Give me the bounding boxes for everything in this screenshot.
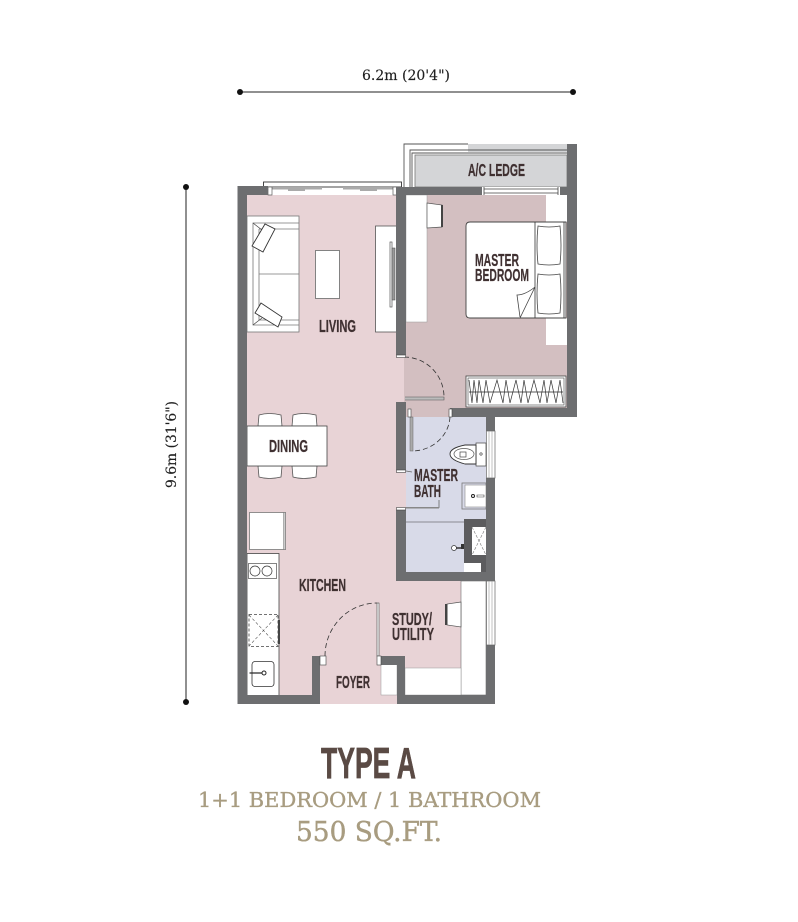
dining table and chairs <box>247 414 327 478</box>
subtitle: area: 550 SQ.FT. <box>296 817 442 848</box>
label: foyer: FOYER <box>336 672 370 692</box>
label: master bedroom <box>475 250 529 285</box>
dimension: width: 6.2m (20'4") <box>362 68 450 84</box>
label: dining: DINING <box>269 436 308 456</box>
label: master bath: MASTER <box>414 465 458 485</box>
title: TYPE A <box>321 739 416 788</box>
label: study/utility <box>392 609 434 644</box>
study window <box>486 581 495 645</box>
bathroom sink <box>462 483 486 509</box>
sofa <box>247 216 299 332</box>
toilet <box>450 443 486 466</box>
bathroom partitions <box>406 471 464 522</box>
A/C ledge <box>404 144 567 187</box>
bedroom desk <box>406 195 443 322</box>
floor: master bedroom <box>404 195 567 417</box>
subtitle: bedrooms: 1+1 BEDROOM / 1 BATHROOM <box>198 788 541 812</box>
bedroom door <box>404 357 444 400</box>
wardrobe <box>466 376 566 407</box>
fridge <box>250 512 286 550</box>
label: kitchen: KITCHEN <box>299 575 346 595</box>
living window <box>264 182 402 195</box>
floor: master bath <box>406 417 486 572</box>
dimension: width <box>237 68 576 95</box>
label: master bath: BATH <box>414 481 441 501</box>
label: study/utility: STUDY/ <box>392 609 432 629</box>
nightstands <box>546 195 567 345</box>
floor: living, dining, kitchen <box>247 195 461 704</box>
bathroom door <box>410 417 450 451</box>
shower <box>452 519 486 572</box>
label: master bath <box>414 465 458 501</box>
TV console <box>376 226 396 332</box>
dimension: height <box>164 184 189 705</box>
bathroom window <box>486 431 495 478</box>
walls <box>238 144 577 704</box>
label: master bedroom: BEDROOM <box>475 265 529 285</box>
dimension: height: 9.6m (31'6") <box>164 401 180 488</box>
entrance door <box>325 603 379 656</box>
kitchen counter <box>247 554 280 696</box>
coffee table <box>316 250 340 298</box>
label: master bedroom: MASTER <box>475 250 519 270</box>
label: A/C ledge: A/C LEDGE <box>468 160 525 180</box>
label: study/utility: UTILITY <box>392 624 434 644</box>
floor plan <box>238 144 577 704</box>
door jambs <box>320 355 452 665</box>
study desk and closet <box>381 581 486 695</box>
bedroom window <box>482 187 560 195</box>
bed <box>466 222 566 318</box>
label: living: LIVING <box>319 316 356 336</box>
